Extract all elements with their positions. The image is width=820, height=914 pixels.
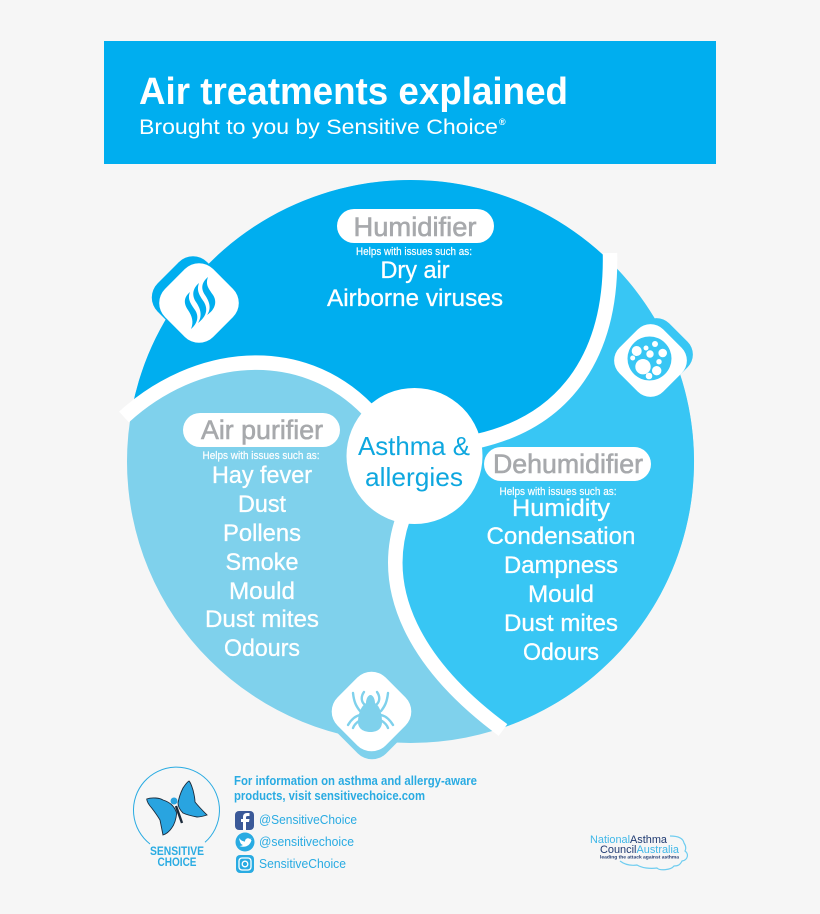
icon: air bubbles [607,311,700,404]
centre label: Asthma & [358,431,470,461]
contact text: For information on asthma and allergy-aware [234,774,477,788]
air purifier pill [183,413,340,447]
social: instagram [236,855,346,873]
air purifier issues: Odours [224,635,300,662]
divider strokes [124,253,610,730]
social: facebook [235,811,357,830]
dehumidifier pill [484,447,651,481]
logo wordmark: SENSITIVE [150,844,204,858]
divider: air purifier and dehumidifier [395,518,503,730]
panel: air purifier [183,413,340,662]
humidifier caption: Helps with issues such as: [356,246,472,258]
segment: air purifier [127,180,694,743]
dehumidifier issues: Condensation [486,523,636,550]
circular diagram [124,180,694,743]
dehumidifier issues: Dampness [504,552,618,579]
air purifier issues: Dust mites [205,606,319,633]
air purifier caption: Helps with issues such as: [202,450,320,462]
air purifier heading: Air purifier [201,415,323,445]
panel: humidifier [327,209,503,312]
social: twitter: @sensitivechoice [259,835,354,849]
sensitive choice logo [133,767,219,869]
logo wordmark [150,844,204,869]
air purifier issues: Smoke [226,549,298,576]
social: twitter [236,832,354,852]
dehumidifier caption: Helps with issues such as: [500,486,616,498]
dehumidifier issues: Mould [528,581,594,608]
divider: humidifier and dehumidifier [478,253,610,441]
panel: dehumidifier [484,447,651,666]
dehumidifier issues: Dust mites [504,610,618,637]
dehumidifier issues: Humidity [512,495,610,522]
logo text: NationalAsthma [590,834,668,846]
segment: dehumidifier [395,253,694,730]
humidifier pill [337,209,494,243]
divider: humidifier and air purifier [124,363,368,417]
logo cloud [620,836,687,870]
header banner [104,41,716,164]
humidifier heading: Humidifier [354,212,477,242]
national asthma council logo [590,834,687,870]
title: Air treatments explained [139,71,568,113]
registered mark: ® [499,117,506,127]
social: facebook: @SensitiveChoice [259,813,357,827]
contact text [234,774,477,803]
icon: dust mite [323,663,420,768]
air purifier issues: Mould [229,578,295,605]
air purifier issues: Pollens [223,520,301,547]
air purifier issues: Dust [238,491,286,518]
social: instagram: SensitiveChoice [259,857,346,871]
icon: steam waves [144,248,247,351]
butterfly [147,781,207,835]
humidifier issues [327,257,503,312]
contact text: products, visit sensitivechoice.com [234,789,425,803]
air purifier issues [205,462,319,662]
centre circle: allergies [365,462,463,492]
butterfly body [176,806,182,823]
dehumidifier issues [486,495,636,666]
national asthma council logo: leading the attack against asthma [600,854,680,860]
national asthma council logo: CouncilAustralia [600,844,680,856]
humidifier issues: Airborne viruses [327,285,503,312]
dehumidifier heading: Dehumidifier [493,449,643,479]
logo wordmark: CHOICE [158,855,196,869]
humidifier issues: Dry air [380,257,450,284]
dehumidifier issues: Odours [523,639,599,666]
air purifier issues: Hay fever [212,462,312,489]
logo ring [133,767,219,844]
centre circle [346,388,482,524]
segment: humidifier [132,180,610,441]
subtitle: Brought to you by Sensitive Choice [139,115,498,139]
